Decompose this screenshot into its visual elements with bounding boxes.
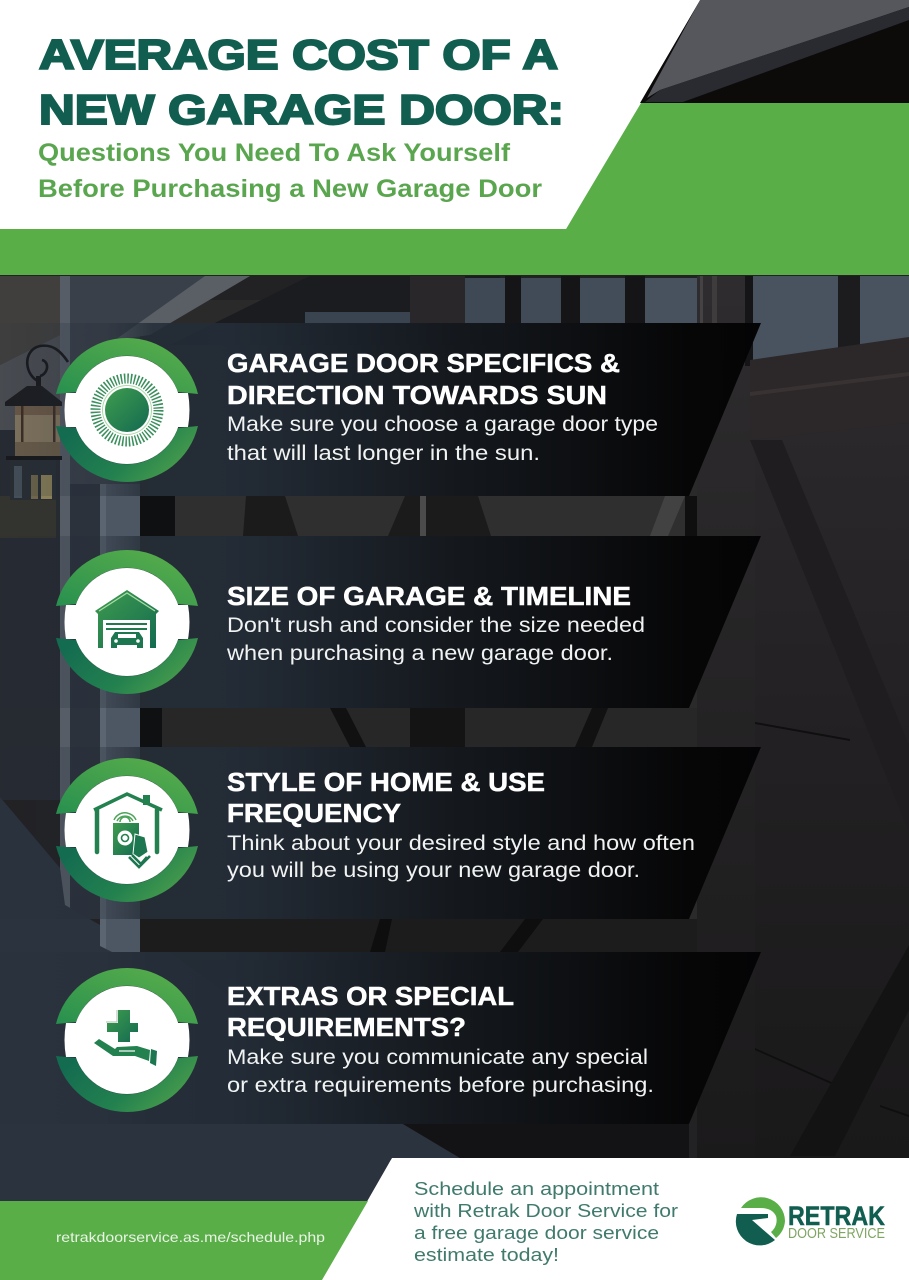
icon: sun badge <box>56 338 198 482</box>
subtitle <box>38 139 542 203</box>
panel: extras <box>0 952 761 1124</box>
background photo: garage doors <box>0 275 909 1201</box>
footer call to action: estimate today! <box>414 1244 559 1265</box>
text block <box>226 614 645 665</box>
footer green bar <box>0 1201 368 1280</box>
title: AVERAGE COST OF A <box>39 31 558 78</box>
subtitle: Before Purchasing a New Garage Door <box>38 175 542 203</box>
panel: size of garage <box>0 536 761 708</box>
logo: Retrak Door Service: RETRAK <box>788 1201 885 1231</box>
text block: you will be using your new garage door. <box>227 859 640 882</box>
icon: plus and hand badge <box>56 968 198 1112</box>
heading: EXTRAS OR SPECIAL <box>227 981 514 1011</box>
logo: Retrak Door Service <box>736 1197 885 1245</box>
footer call to action: Schedule an appointment <box>414 1178 659 1199</box>
icon: garage badge <box>56 550 198 694</box>
text block: Don't rush and consider the size needed <box>227 614 645 637</box>
driveway <box>0 797 460 1201</box>
green header band <box>0 103 909 275</box>
logo: Retrak Door Service: DOOR SERVICE <box>788 1225 885 1242</box>
heading: DIRECTION TOWARDS SUN <box>227 380 607 410</box>
title <box>39 31 564 133</box>
text block: Make sure you choose a garage door type <box>227 413 658 436</box>
panel: style of home <box>0 747 761 919</box>
heading: SIZE OF GARAGE & TIMELINE <box>227 581 631 611</box>
text block <box>227 413 658 465</box>
text block <box>227 1046 654 1097</box>
icon: smart home badge <box>56 758 198 902</box>
heading: GARAGE DOOR SPECIFICS & <box>227 348 620 378</box>
column <box>100 484 140 952</box>
header image: roof corner <box>640 0 909 103</box>
heading <box>227 348 620 410</box>
footer white panel <box>322 1158 909 1280</box>
subtitle: Questions You Need To Ask Yourself <box>38 139 511 167</box>
text block: when purchasing a new garage door. <box>226 642 613 665</box>
icon: wall lantern <box>5 346 68 500</box>
door section between panels 1 and 2 <box>140 496 697 536</box>
title: NEW GARAGE DOOR: <box>39 86 564 133</box>
heading: STYLE OF HOME & USE <box>227 767 545 797</box>
text block <box>227 832 695 882</box>
footer call to action <box>413 1178 678 1265</box>
text block: or extra requirements before purchasing. <box>227 1074 654 1097</box>
heading <box>227 767 545 828</box>
footer call to action: with Retrak Door Service for <box>413 1200 678 1221</box>
footer call to action: a free garage door service <box>414 1222 659 1243</box>
door section between panels 3 and 4 <box>140 919 697 952</box>
door section between panels 2 and 3 <box>140 708 697 747</box>
heading: REQUIREMENTS? <box>227 1012 466 1042</box>
text block: that will last longer in the sun. <box>227 442 540 465</box>
text block: Think about your desired style and how often <box>227 832 695 855</box>
footer url: retrakdoorservice.as.me/schedule.php <box>56 1229 325 1245</box>
heading: FREQUENCY <box>227 798 401 828</box>
heading <box>227 981 514 1042</box>
text block: Make sure you communicate any special <box>227 1046 648 1069</box>
white header panel <box>0 0 700 229</box>
panel: garage door specifics <box>0 323 761 496</box>
